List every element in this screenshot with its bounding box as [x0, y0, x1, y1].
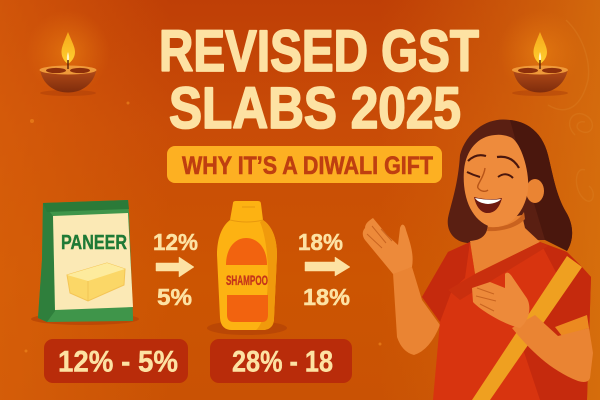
- arrow: [156, 257, 194, 277]
- hair: [448, 119, 572, 251]
- title: REVISED GST: [159, 19, 479, 84]
- chest arm: [512, 315, 593, 382]
- neck and chest: [470, 215, 540, 274]
- face: [464, 135, 528, 227]
- rate change: shampoo: [298, 229, 350, 310]
- rate badge: paneer: 12% - 5%: [58, 346, 178, 378]
- rate badge: shampoo: [210, 339, 352, 383]
- rate badge: shampoo: 28% - 18: [232, 346, 333, 378]
- saree: [422, 242, 591, 400]
- rate change: shampoo: 18%: [303, 284, 350, 310]
- icon: shampoo bottle: [207, 201, 287, 335]
- rate change: shampoo: 18%: [298, 229, 343, 255]
- nose: [478, 168, 488, 191]
- rate change: paneer: 12%: [153, 229, 198, 255]
- chest hand: [472, 273, 529, 328]
- icon: left diya: [40, 32, 96, 96]
- title: SLABS 2025: [169, 76, 461, 141]
- sleeve cuff: [555, 315, 589, 336]
- butter block: [67, 263, 125, 301]
- rate badge: paneer: [44, 339, 188, 383]
- icon: paneer packet: PANEER: [61, 232, 127, 254]
- mouth: [474, 197, 502, 213]
- rate change: paneer: [153, 229, 198, 310]
- eyes: [467, 172, 513, 178]
- title: [159, 19, 479, 141]
- ear: [526, 179, 544, 203]
- illustration: smiling woman: [363, 119, 593, 400]
- subtitle pill: WHY IT’S A DIWALI GIFT: [182, 152, 433, 180]
- raised hand: [363, 218, 413, 274]
- icon: paneer packet: [31, 200, 139, 325]
- rate change: paneer: 5%: [157, 284, 192, 310]
- saree border: [472, 256, 582, 400]
- subtitle pill: [167, 146, 442, 183]
- raised arm: [393, 267, 440, 355]
- icon: shampoo bottle: SHAMPOO: [226, 272, 268, 288]
- arrow: [305, 257, 350, 276]
- icon: right diya: [512, 32, 568, 96]
- eyebrows: [468, 155, 519, 168]
